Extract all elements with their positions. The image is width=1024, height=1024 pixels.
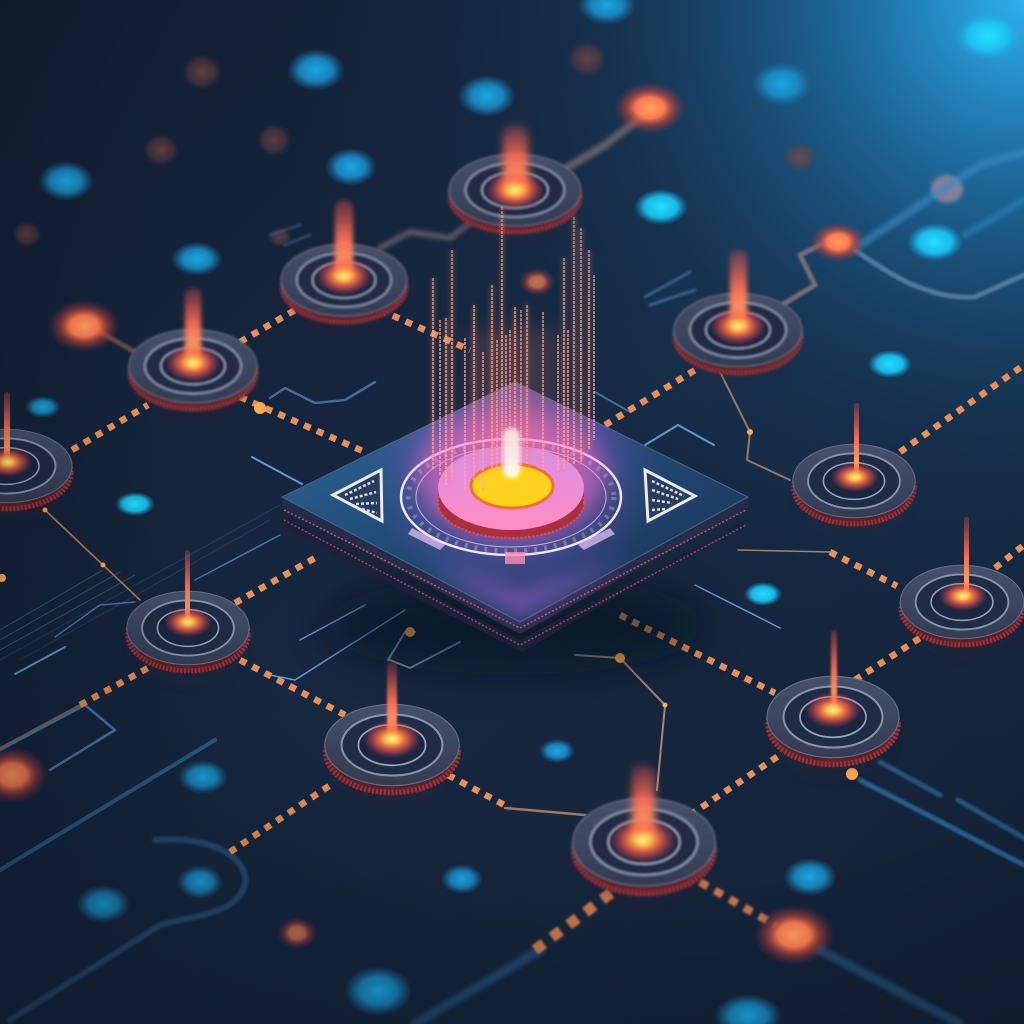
small orange junction dots: [0, 402, 858, 780]
beam lines: [433, 207, 594, 490]
node 10: [325, 662, 459, 795]
left triangular emblem: [333, 470, 382, 521]
central yellow core: [471, 464, 553, 508]
node 1: top: [449, 125, 581, 234]
chip pink glow: [282, 382, 748, 622]
pale pink dot upper right: [931, 175, 963, 203]
glowing orange end dots: [0, 82, 866, 965]
dim red background dots: [12, 41, 818, 247]
node 4: [674, 250, 802, 375]
chip ring graphic: [401, 439, 621, 555]
node 11: bottom: [573, 765, 715, 896]
node 6: [793, 403, 915, 526]
central disc rim: [438, 490, 584, 538]
data light beams rising from chip: [433, 207, 594, 490]
node 2: [281, 200, 407, 324]
beam glow: [433, 207, 589, 485]
chip top face: [282, 382, 748, 622]
node 8: [900, 517, 1024, 647]
central disc top: [438, 446, 584, 530]
node 5: left edge: [0, 392, 72, 511]
left side fine circuit traces: [0, 505, 1024, 1024]
chip upper layer edge: [282, 497, 748, 634]
upper right and upper left soft traces: [100, 118, 1024, 484]
ring bottom tabs: [408, 528, 615, 564]
chip bottom purple sheen: [430, 560, 630, 620]
node 3: [129, 288, 257, 411]
right triangular emblem: [645, 470, 695, 521]
node 7: [127, 550, 249, 673]
central disc glow: [416, 413, 606, 537]
dashed orange connectors: [72, 310, 1024, 950]
chip lower layer: [284, 518, 748, 652]
chip shadow: [325, 575, 705, 675]
central white light column: [470, 330, 560, 478]
node 9: [767, 630, 899, 767]
central chip: [282, 382, 748, 652]
